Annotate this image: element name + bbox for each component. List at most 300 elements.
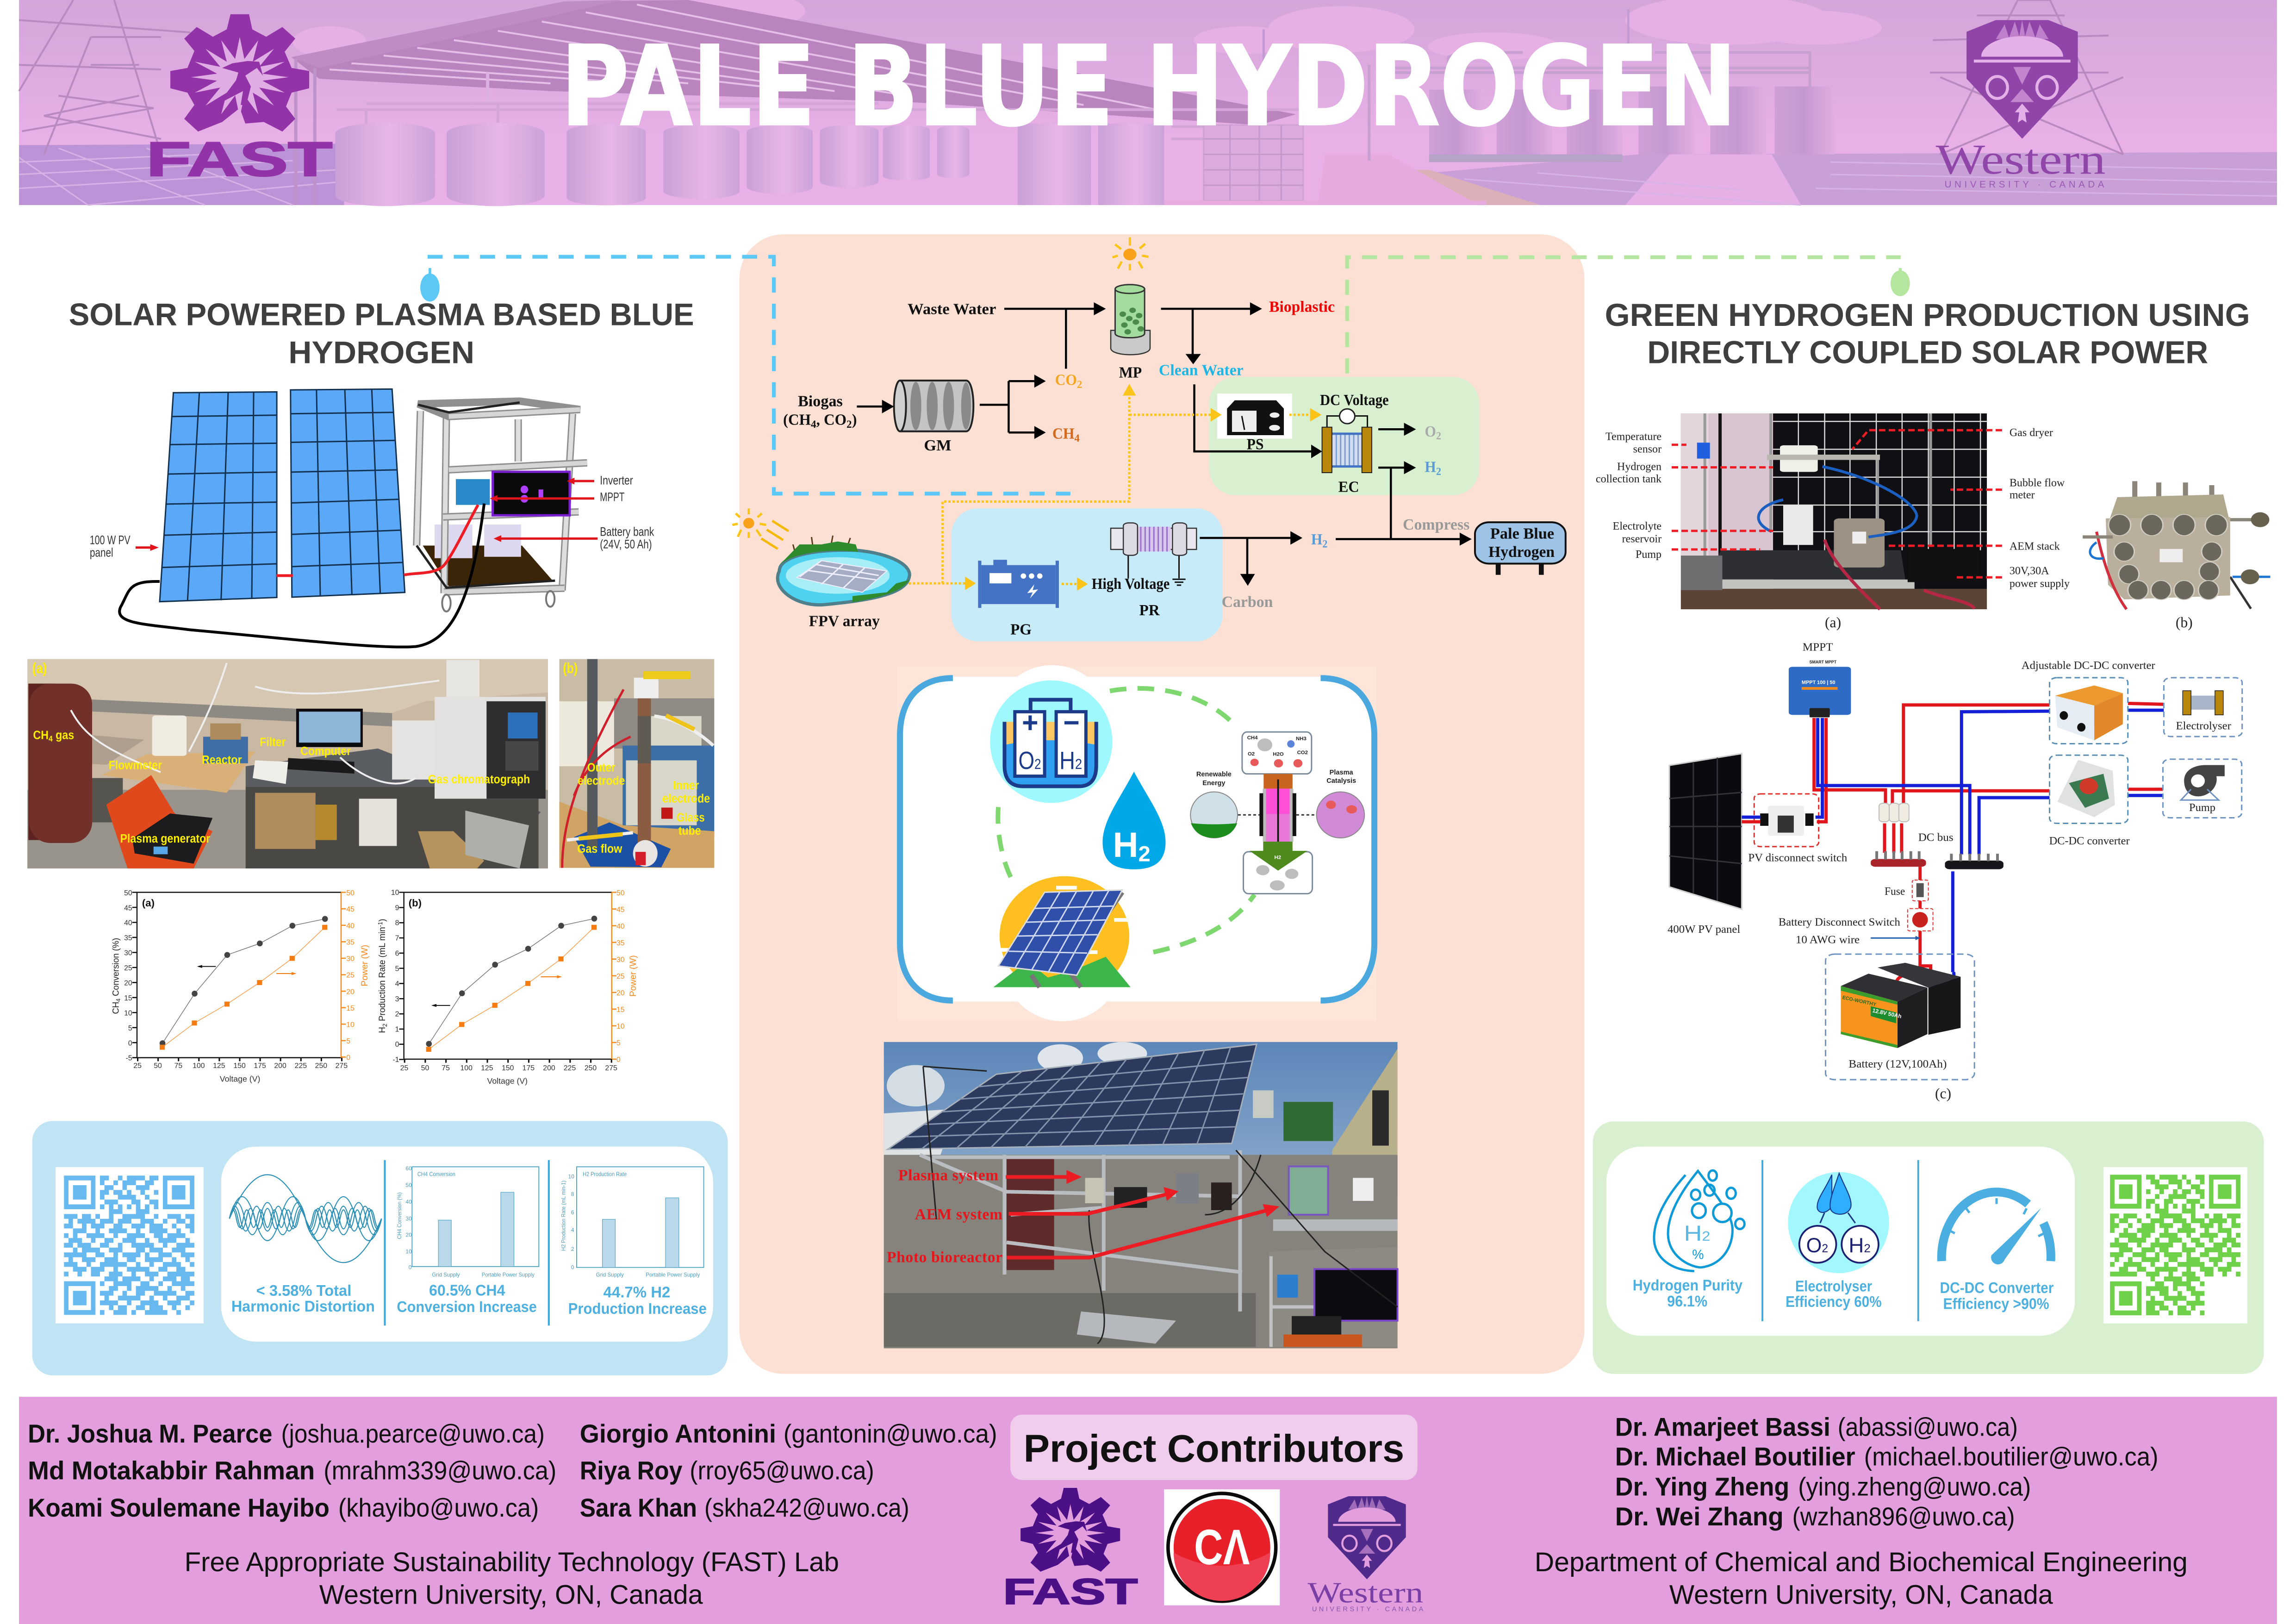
axis titles: Power (W) <box>628 955 638 997</box>
stat: DC-DC converter efficiency: Efficiency >90% <box>1943 1295 2049 1312</box>
contributors: right column: (abassi@uwo.ca) <box>1838 1413 2018 1442</box>
heading: solar powered plasma based blue hydrogen: SOLAR POWERED PLASMA BASED BLUE <box>69 297 694 332</box>
icon: water splitting <box>1788 1172 1889 1273</box>
photo labels: electrode <box>662 793 710 806</box>
axis titles: 2 <box>381 1024 388 1027</box>
left axis labels: 9 <box>395 904 399 912</box>
PV panels <box>160 389 405 602</box>
diagram labels: 2 <box>1322 538 1327 550</box>
logo: Western University <box>1936 20 2106 190</box>
left axis labels: -5 <box>126 1055 132 1062</box>
x axis labels: 50 <box>421 1064 429 1072</box>
bar chart: CH4 conversion: 30 <box>405 1215 412 1222</box>
right axis labels: 35 <box>616 939 625 947</box>
right axis labels: 20 <box>616 989 625 997</box>
plasma catalysis figure: CO2 <box>1297 750 1308 756</box>
icon: water splitting: O2 <box>1806 1234 1828 1257</box>
schematic labels: Adjustable DC-DC converter <box>2022 660 2155 672</box>
right axis labels: 30 <box>346 955 355 963</box>
left axis labels: 0 <box>395 1041 399 1049</box>
white stats card <box>221 1147 713 1342</box>
MPPT controller <box>1789 667 1851 718</box>
axis titles: H <box>378 1027 387 1033</box>
diagram labels: Waste Water <box>908 300 996 318</box>
left axis labels <box>124 889 132 1062</box>
x axis labels: 75 <box>174 1062 182 1070</box>
bar chart: H2 production rate: Portable Power Supply <box>646 1271 700 1278</box>
product labels on MPPT and battery: SMART MPPT <box>1810 660 1837 664</box>
figure: PV panels, cart and wiring <box>90 389 654 647</box>
axis titles <box>377 897 638 1033</box>
stat: CH4 conversion increase <box>397 1281 537 1315</box>
contributors: right column: (wzhan896@uwo.ca) <box>1792 1502 2015 1531</box>
stat: total harmonic distortion: Harmonic Distortion <box>231 1298 375 1315</box>
logo: FAST gear: FAST <box>146 132 332 187</box>
diagram labels: PR <box>1139 602 1160 619</box>
PV panel <box>1669 754 1742 909</box>
caption (b): (b) <box>2176 614 2193 631</box>
schematic labels: Battery (12V,100Ah) <box>1848 1058 1947 1070</box>
x axis labels: 275 <box>605 1064 617 1072</box>
icon: H2 droplet: H <box>1113 825 1138 865</box>
photo labels: Plasma system <box>898 1167 998 1184</box>
plasma catalysis figure: O2 <box>1248 751 1255 757</box>
callout labels: 100 W PV <box>90 532 131 547</box>
left axis labels: 40 <box>124 919 132 927</box>
x axis labels: 275 <box>336 1062 348 1070</box>
photo labels: Gas chromatograph <box>428 773 530 786</box>
diagram labels: PG <box>1010 621 1032 638</box>
fuses <box>1879 803 1909 822</box>
diagram labels: Hydrogen <box>1488 543 1555 561</box>
plasma catalysis figure: Renewable <box>1196 771 1232 778</box>
banner background image: hydrogen plant <box>19 0 2277 206</box>
stat: DC-DC converter efficiency: DC-DC Converter <box>1940 1279 2054 1296</box>
axis titles: ) <box>378 919 387 922</box>
schematic labels: PV disconnect switch <box>1748 852 1847 864</box>
diagram labels: Pale Blue <box>1490 525 1554 542</box>
wiring schematic (c) <box>1668 642 2242 1101</box>
bar chart: CH4 conversion: Portable Power Supply <box>482 1271 535 1278</box>
photo labels: Photo bioreactor <box>887 1249 1002 1266</box>
axis titles <box>111 897 370 1014</box>
x axis labels: 175 <box>254 1062 266 1070</box>
x axis labels: Voltage (V) <box>487 1076 528 1086</box>
x axis labels: 200 <box>274 1062 286 1070</box>
QR code blue <box>56 1167 204 1324</box>
callout labels: MPPT <box>600 490 624 504</box>
caption (c): (c) <box>1935 1085 1951 1101</box>
x axis labels: 175 <box>523 1064 535 1072</box>
contributors: right column: Dr. Amarjeet Bassi <box>1615 1413 1830 1442</box>
dividers <box>385 1160 549 1325</box>
axis titles: CH <box>111 1001 121 1014</box>
solar power dotted lines <box>908 384 1321 591</box>
logo: FAST: FAST <box>1003 1571 1138 1612</box>
contributors: left column: Dr. Joshua M. Pearce <box>28 1419 272 1448</box>
diagram labels: ) <box>852 412 857 429</box>
harmonic waveform icon <box>230 1174 381 1262</box>
axis titles: (a) <box>142 897 155 909</box>
axis titles: Power (W) <box>360 945 370 986</box>
icon: hydrogen purity droplet: H 2 <box>1684 1221 1710 1246</box>
sun and photobioreactor <box>1111 237 1150 355</box>
bar chart: CH4 conversion: 10 <box>405 1248 412 1255</box>
bar chart: CH4 conversion <box>396 1165 539 1278</box>
photo labels: Flowmeter <box>109 759 162 772</box>
battery <box>1826 954 1974 1080</box>
left axis labels: 0 <box>128 1039 132 1047</box>
x axis labels <box>400 1064 617 1086</box>
product labels on MPPT and battery: ECO-WORTHY <box>1842 995 1877 1007</box>
diagram labels: GM <box>924 437 952 454</box>
right axis labels: 0 <box>616 1056 621 1064</box>
stat: CH4 conversion increase: 60.5% CH4 <box>429 1281 505 1299</box>
contributors: second column: (rroy65@uwo.ca) <box>690 1456 874 1485</box>
icon: hydrogen purity droplet <box>1654 1170 1744 1271</box>
left axis labels: 6 <box>395 949 399 957</box>
left axis labels: 20 <box>124 980 132 987</box>
left axis labels <box>391 889 399 1064</box>
logo: red badge: CΛ <box>1194 1519 1250 1575</box>
cables and arrows <box>119 478 597 647</box>
bar chart: H2 production rate: Grid Supply <box>596 1271 624 1278</box>
bar chart: H2 production rate: 2 <box>571 1246 574 1252</box>
right axis labels: 40 <box>346 922 355 930</box>
x axis labels <box>133 1062 348 1084</box>
photo labels <box>887 1167 1002 1266</box>
affiliation: FAST lab: Free Appropriate Sustainability Technology (FAST) Lab <box>185 1547 839 1577</box>
power supply PS <box>1217 394 1292 439</box>
right axis labels: 35 <box>346 938 355 946</box>
photo labels: Reactor <box>202 754 242 767</box>
right axis labels: 10 <box>616 1023 625 1031</box>
QR code green <box>2103 1167 2247 1324</box>
diagram labels: FPV array <box>809 613 880 630</box>
left axis labels: 45 <box>124 904 132 912</box>
DC-DC converter <box>2049 755 2128 824</box>
stat: H2 production increase: Production Increase <box>568 1300 707 1317</box>
bar chart: CH4 conversion: CH4 Conversion (%) <box>396 1192 403 1239</box>
heading: solar powered plasma based blue hydrogen: HYDROGEN <box>288 336 474 370</box>
contributors: right column: Dr. Michael Boutilier <box>1615 1442 1855 1471</box>
contributors: right column <box>1615 1413 2159 1531</box>
affiliation: department: Western University, ON, Canada <box>1669 1580 2053 1610</box>
stat: total harmonic distortion <box>231 1282 375 1315</box>
photo labels: tube <box>678 824 701 837</box>
icon: electrolyser <box>990 681 1113 803</box>
line chart (b): H2 production rate vs voltage <box>377 889 638 1086</box>
axis titles: -1 <box>377 922 384 927</box>
bar chart: CH4 conversion: 0 <box>409 1264 412 1271</box>
left axis labels: 7 <box>395 935 399 943</box>
plasma catalysis figure: NH3 <box>1296 736 1307 742</box>
PV disconnect switch <box>1754 794 1819 847</box>
stat: CH4 conversion increase: Conversion Increase <box>397 1298 537 1315</box>
plasma catalysis figure: H2 <box>1275 855 1281 861</box>
plasma zone <box>952 508 1223 641</box>
flow diagram: hybrid process <box>732 237 1566 641</box>
axis titles: 4 <box>115 999 122 1002</box>
title: PALE BLUE HYDROGEN <box>561 23 1736 150</box>
stat: electrolyser efficiency: Electrolyser <box>1795 1277 1872 1294</box>
pylons <box>19 0 2123 154</box>
icon: H2 droplet: 2 <box>1138 842 1151 866</box>
left axis labels: 1 <box>395 1025 399 1033</box>
connector: green dashed line and pin <box>1347 257 1910 374</box>
callout labels: Battery bank <box>600 524 654 538</box>
x axis labels: 25 <box>133 1062 142 1070</box>
contributors: right column: Dr. Ying Zheng <box>1615 1472 1789 1501</box>
contributors: second column: Giorgio Antonini <box>580 1419 776 1448</box>
bar chart: CH4 conversion: 40 <box>405 1199 412 1205</box>
heading: green hydrogen production <box>1605 298 2250 370</box>
contributors: left column: (mrahm339@uwo.ca) <box>324 1456 556 1485</box>
plasma catalysis figure: H2O <box>1273 752 1284 757</box>
right axis labels <box>346 889 355 1062</box>
photo (b): plasma reactor <box>559 659 714 868</box>
diagram labels: 2 <box>1436 466 1441 478</box>
photo labels: AEM system <box>915 1206 1002 1223</box>
x axis labels: 200 <box>543 1064 555 1072</box>
right axis labels: 15 <box>616 1006 625 1014</box>
product labels on MPPT and battery <box>1802 660 1902 1020</box>
bar chart: CH4 conversion: 20 <box>405 1232 412 1238</box>
plasma catalysis figure: Catalysis <box>1326 777 1356 785</box>
left axis labels: 8 <box>395 919 399 927</box>
cart with inverter, MPPT and batteries <box>417 401 587 612</box>
schematic labels: Fuse <box>1885 886 1905 898</box>
photo labels: Computer <box>300 745 351 758</box>
electrolysis zone <box>1209 377 1479 495</box>
logo: Western <box>1307 1496 1424 1613</box>
header banner <box>19 0 2277 206</box>
axis titles: Conversion (%) <box>111 938 121 999</box>
logo: red badge <box>1164 1489 1280 1605</box>
left axis labels: 35 <box>124 934 132 942</box>
stat: total harmonic distortion: < 3.58% Total <box>256 1282 351 1299</box>
bar chart: H2 production rate: 10 <box>568 1173 574 1180</box>
photo (a): AEM electrolyser test stand <box>1596 413 2070 631</box>
logo: Western: UNIVERSITY · CANADA <box>1312 1605 1424 1613</box>
affiliation: FAST lab <box>185 1547 839 1610</box>
contributors: right column: Dr. Wei Zhang <box>1615 1502 1784 1531</box>
left axis labels: 25 <box>124 964 132 972</box>
left axis labels: 5 <box>395 965 399 973</box>
x axis labels: 250 <box>315 1062 327 1070</box>
callout labels right <box>2010 427 2070 590</box>
diagram labels: 2 <box>846 418 852 431</box>
left axis labels: 4 <box>395 980 399 988</box>
right axis labels: 5 <box>346 1037 350 1045</box>
left axis labels: 10 <box>124 1010 132 1018</box>
diagram labels: MP <box>1119 364 1142 381</box>
logo: Western University: UNIVERSITY · CANADA <box>1945 179 2104 190</box>
callout labels right: Gas dryer <box>2010 427 2053 439</box>
right axis labels: 10 <box>346 1021 355 1029</box>
x axis labels: 125 <box>481 1064 493 1072</box>
schematic labels: MPPT <box>1803 642 1833 654</box>
heading: green hydrogen production: DIRECTLY COUPLED SOLAR POWER <box>1647 335 2208 370</box>
schematic labels: Battery Disconnect Switch <box>1779 917 1900 929</box>
contributors: second column <box>580 1419 997 1522</box>
right axis labels: 45 <box>346 906 355 913</box>
icon: solar panel on sun <box>993 876 1132 1000</box>
logo: Western University: Western <box>1936 136 2106 183</box>
photo labels <box>32 660 530 845</box>
schematic labels: Electrolyser <box>2176 720 2231 732</box>
contributors: second column: (gantonin@uwo.ca) <box>784 1419 997 1448</box>
plasma generator PG <box>978 560 1059 608</box>
photo labels: Glass <box>677 811 705 824</box>
callout labels right: meter <box>2010 489 2035 501</box>
right axis labels: 25 <box>616 973 625 981</box>
callout labels: Electrolyte <box>1613 520 1661 532</box>
panel: green results <box>1593 1122 2264 1374</box>
right axis labels: 50 <box>616 889 625 897</box>
diagram labels: 2 <box>1077 379 1082 391</box>
axis titles: (b) <box>409 897 422 909</box>
x axis labels: 250 <box>585 1064 597 1072</box>
diagram labels: Bioplastic <box>1269 298 1335 315</box>
electrolysis cell EC <box>1322 409 1372 473</box>
right axis labels: 5 <box>616 1039 621 1047</box>
contributors: right column: (michael.boutilier@uwo.ca) <box>1864 1442 2159 1471</box>
schematic labels: 10 AWG wire <box>1796 934 1860 946</box>
right axis labels: 30 <box>616 956 625 964</box>
diagram labels: CO <box>1055 371 1078 388</box>
plasma catalysis figure <box>1190 732 1364 893</box>
bar chart: CH4 conversion: 60 <box>405 1165 412 1172</box>
schematic labels: 400W PV panel <box>1668 924 1741 936</box>
hydrogen tanks <box>336 123 435 206</box>
central graphic: hydrogen cycle card <box>897 665 1376 1021</box>
x axis labels: 225 <box>295 1062 307 1070</box>
diagram labels: Compress <box>1403 516 1469 533</box>
bar chart: H2 production rate: 4 <box>571 1227 574 1233</box>
icon: water splitting: H2 <box>1848 1234 1871 1257</box>
schematic labels: DC bus <box>1918 832 1954 844</box>
product labels on MPPT and battery: MPPT 100 | 50 <box>1802 680 1836 686</box>
left axis labels: 15 <box>124 994 132 1002</box>
x axis labels: 75 <box>442 1064 450 1072</box>
callout labels: sensor <box>1633 443 1661 456</box>
silos and pipes <box>1369 52 1835 162</box>
callout labels: panel <box>90 545 113 559</box>
floor: solar field <box>19 144 344 205</box>
bar chart: H2 production rate: H2 Production Rate <box>583 1171 627 1178</box>
adjustable DC-DC converter <box>2049 678 2128 743</box>
dividers <box>1762 1160 1918 1321</box>
stat: hydrogen purity: Hydrogen Purity <box>1633 1276 1743 1293</box>
contributors: left column <box>28 1419 556 1522</box>
panel: blue results <box>32 1121 728 1375</box>
contributors: second column: (skha242@uwo.ca) <box>704 1493 909 1522</box>
callout labels <box>90 473 654 559</box>
stat: DC-DC converter efficiency <box>1940 1279 2054 1312</box>
callout labels: Pump <box>1636 549 1661 561</box>
x axis labels: Voltage (V) <box>220 1074 260 1084</box>
left axis labels: -1 <box>392 1056 399 1064</box>
photo: outdoor system <box>884 1042 1398 1349</box>
bar chart: H2 production rate <box>560 1167 704 1278</box>
left axis labels: 50 <box>124 889 132 897</box>
right axis labels: 20 <box>346 988 355 996</box>
diagram labels: High Voltage <box>1092 575 1170 593</box>
card shape with blue corners <box>897 665 1376 1021</box>
photo labels: Plasma generator <box>120 832 210 845</box>
footer band <box>19 1397 2277 1624</box>
contributors: right column: (ying.zheng@uwo.ca) <box>1798 1472 2031 1501</box>
callout labels right: 30V,30A <box>2010 565 2049 577</box>
contributors: left column: Koami Soulemane Hayibo <box>28 1493 330 1522</box>
x axis labels: 225 <box>564 1064 576 1072</box>
diagram labels: 2 <box>1436 430 1441 442</box>
diagram labels: (CH <box>783 412 811 429</box>
schematic labels <box>1668 642 2231 1070</box>
affiliation: department: Department of Chemical and Biochemical Engineering <box>1535 1547 2188 1577</box>
diagram labels: 4 <box>1075 432 1080 444</box>
diagram labels: H <box>1425 459 1437 476</box>
photo labels: (a) <box>32 660 47 676</box>
stat: electrolyser efficiency: Efficiency 60% <box>1786 1293 1882 1310</box>
fuse and battery switch <box>1871 880 1933 940</box>
left axis labels: 30 <box>124 949 132 957</box>
diagram labels: DC Voltage <box>1320 392 1389 409</box>
diagram labels: O <box>1425 423 1437 440</box>
project contributors heading <box>1010 1415 1418 1480</box>
bar chart: H2 production rate: 0 <box>571 1264 574 1271</box>
affiliation: department <box>1535 1547 2188 1610</box>
photo labels <box>563 660 710 856</box>
photo labels: electrode <box>578 775 625 787</box>
bar chart: H2 production rate: H2 Production Rate (mL min-1) <box>560 1181 566 1251</box>
bar chart: CH4 conversion: CH4 Conversion <box>417 1171 455 1178</box>
x axis labels: 25 <box>400 1064 409 1072</box>
stat: hydrogen purity: 96.1% <box>1667 1293 1707 1310</box>
photo labels: gas <box>53 729 74 742</box>
product labels on MPPT and battery: 12.8V 50Ah <box>1872 1007 1902 1020</box>
line chart (a): CH4 conversion vs voltage <box>111 889 370 1084</box>
icon: electrolyser: O2 <box>1018 747 1041 775</box>
roof truss <box>292 0 1296 125</box>
callout labels: reservoir <box>1622 533 1661 545</box>
diagram labels: CH <box>1052 425 1076 443</box>
logo: Western: Western <box>1307 1576 1423 1609</box>
diagram labels: Biogas <box>798 393 843 410</box>
diagram labels: Clean Water <box>1159 362 1244 379</box>
photo labels: (b) <box>563 660 578 676</box>
callout labels <box>1596 431 1662 561</box>
bar chart: CH4 conversion: 50 <box>405 1182 412 1188</box>
icon: H2 droplet <box>1102 772 1165 869</box>
axis titles: Production Rate (mL min <box>378 927 387 1024</box>
plasma catalysis figure: Plasma <box>1330 769 1354 776</box>
right axis labels: 25 <box>346 972 355 980</box>
icon: electrolyser: H2 <box>1059 747 1082 775</box>
callout labels right: Bubble flow <box>2010 477 2065 489</box>
right axis labels: 50 <box>346 889 355 897</box>
stat: H2 production increase: 44.7% H2 <box>604 1283 670 1300</box>
photo labels: Gas flow <box>577 843 622 856</box>
right axis labels: 40 <box>616 923 625 931</box>
x axis labels: 50 <box>154 1062 162 1070</box>
schematic labels: Pump <box>2189 802 2215 814</box>
callout labels right: power supply <box>2010 578 2070 590</box>
contributors: second column: Riya Roy <box>580 1456 682 1485</box>
callout labels: Temperature <box>1605 431 1661 443</box>
electrolyser box <box>2164 678 2242 737</box>
